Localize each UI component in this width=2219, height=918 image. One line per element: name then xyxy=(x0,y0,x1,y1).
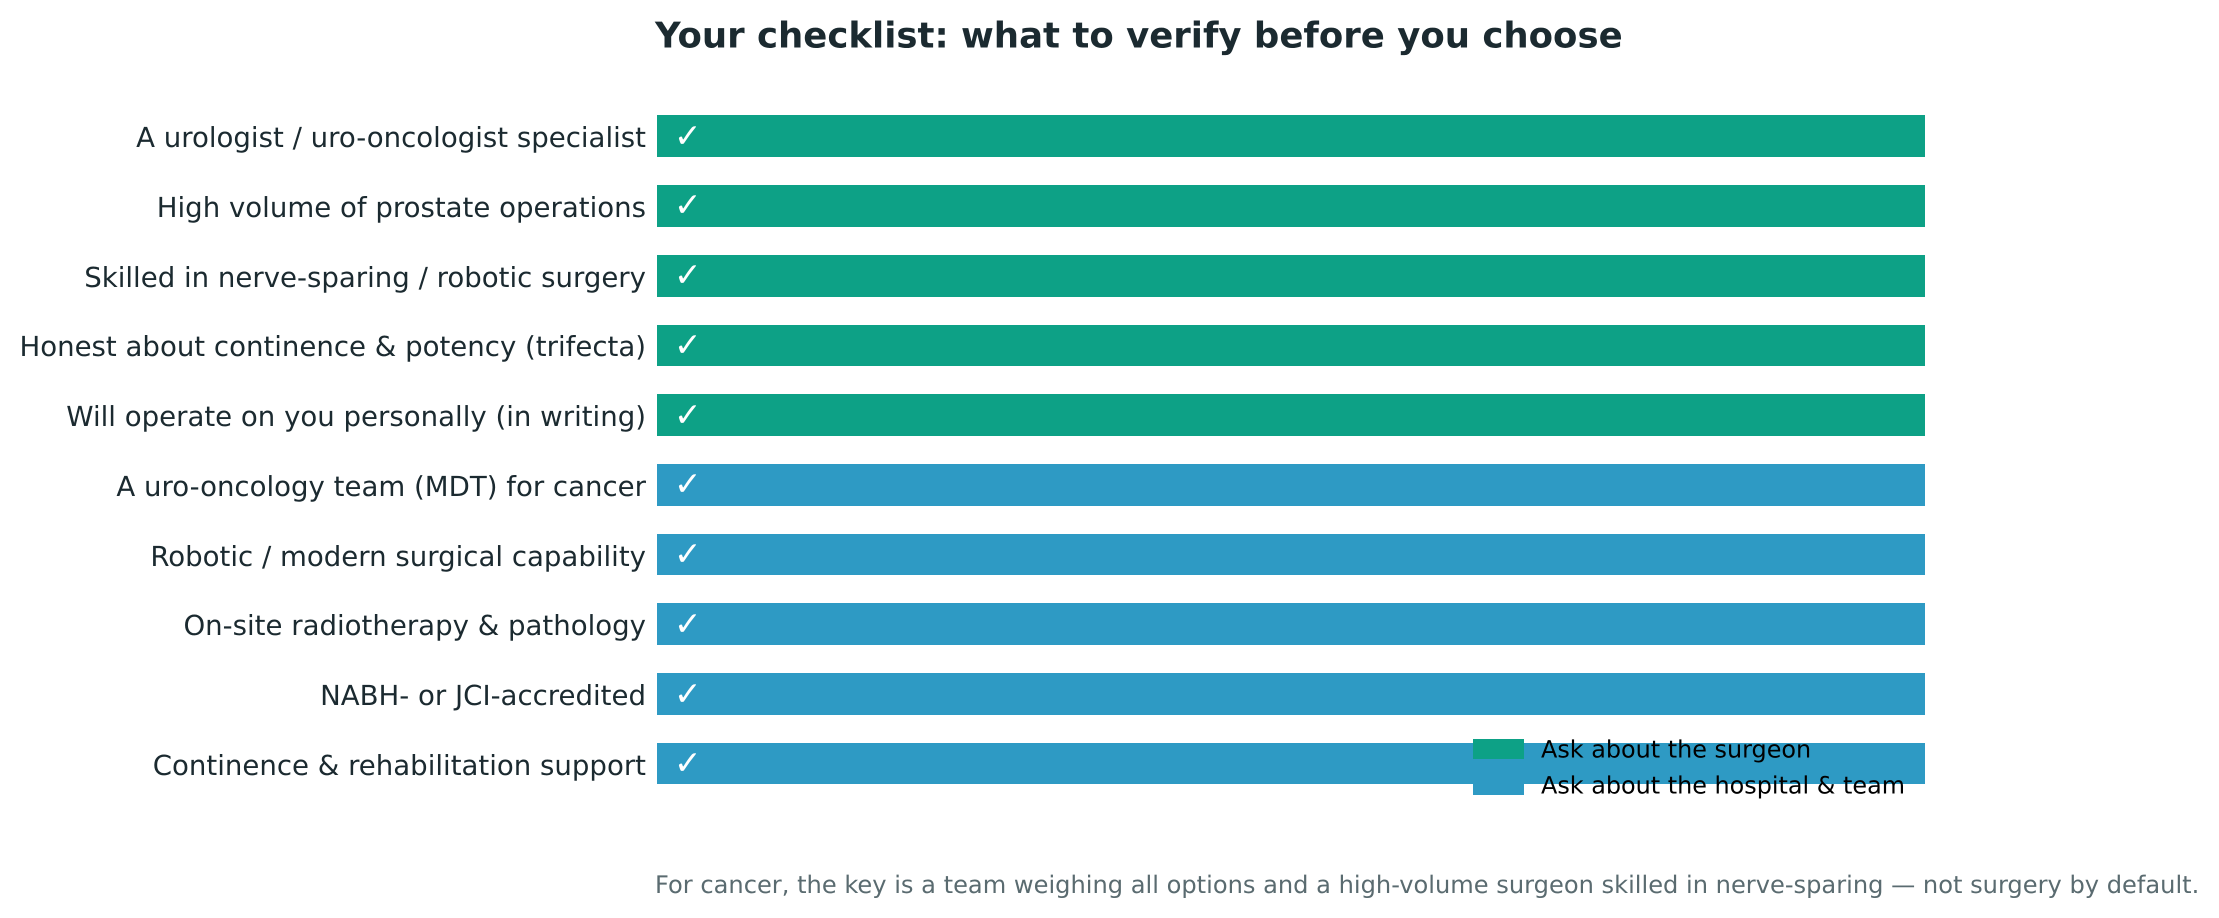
footnote: For cancer, the key is a team weighing all options and a high-volume surgeon skilled in nerve-sparing — not surgery by default. xyxy=(655,871,2199,899)
row: rehabilitation support: ✓ xyxy=(674,743,702,782)
legend entry: hospital and team: Ask about the hospital & team xyxy=(1541,772,1905,800)
row: nerve-sparing: Skilled in nerve-sparing / robotic surgery xyxy=(84,261,646,294)
row: MDT team: ✓ xyxy=(674,464,702,503)
row: radiotherapy and pathology: ✓ xyxy=(674,604,702,643)
row: radiotherapy and pathology: On-site radiotherapy & pathology xyxy=(183,609,646,642)
row: robotic capability: ✓ xyxy=(674,534,702,573)
row: rehabilitation support: Continence & rehabilitation support xyxy=(153,749,646,782)
row: MDT team xyxy=(116,464,1925,506)
row: operates personally: Will operate on you personally (in writing) xyxy=(66,400,646,433)
row: accreditation: NABH- or JCI-accredited xyxy=(320,679,646,712)
title: Your checklist: what to verify before you choose xyxy=(654,16,1623,56)
row: high volume: High volume of prostate operations xyxy=(157,191,646,224)
row: rehabilitation support xyxy=(153,743,1925,784)
row: operates personally: ✓ xyxy=(674,395,702,434)
row: robotic capability: Robotic / modern surgical capability xyxy=(150,540,646,573)
row: robotic capability xyxy=(150,534,1925,575)
row: honest about outcomes: ✓ xyxy=(674,325,702,364)
row: urologist specialist: ✓ xyxy=(674,116,702,155)
row: high volume: ✓ xyxy=(674,185,702,224)
row: nerve-sparing: ✓ xyxy=(674,255,702,294)
row: radiotherapy and pathology xyxy=(183,603,1925,645)
row: operates personally xyxy=(66,394,1925,436)
row: accreditation xyxy=(320,673,1925,715)
legend entry: surgeon: Ask about the surgeon xyxy=(1541,736,1811,764)
row: accreditation: ✓ xyxy=(674,674,702,713)
row: MDT team: A uro-oncology team (MDT) for cancer xyxy=(116,470,647,503)
row: urologist specialist xyxy=(136,115,1925,157)
row: honest about outcomes: Honest about continence & potency (trifecta) xyxy=(19,330,646,363)
row: high volume xyxy=(157,185,1925,227)
legend xyxy=(1473,736,1905,800)
chart: checklist bars xyxy=(19,115,1925,784)
row: nerve-sparing xyxy=(84,255,1925,297)
row: honest about outcomes xyxy=(19,325,1925,366)
row: urologist specialist: A urologist / uro-oncologist specialist xyxy=(136,121,646,154)
